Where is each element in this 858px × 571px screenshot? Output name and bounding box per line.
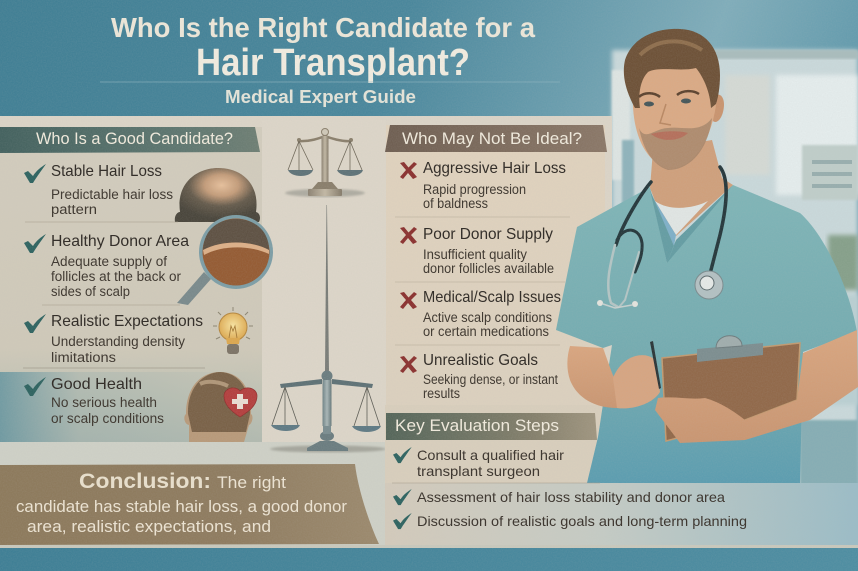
item: healthy donor area: Healthy Donor Area bbox=[51, 233, 189, 250]
not ideal header bbox=[385, 125, 607, 152]
beige strip below right panel bbox=[385, 405, 610, 485]
lower left paper strip bbox=[0, 442, 400, 546]
item: aggressive hair loss bbox=[400, 160, 566, 211]
panel: conclusion: candidate has stable hair loss, a good donor bbox=[16, 497, 347, 516]
item: medical scalp issues bbox=[400, 289, 561, 339]
item: medical scalp issues: Medical/Scalp Issues bbox=[423, 289, 561, 306]
item: medical scalp issues: or certain medications bbox=[423, 324, 549, 339]
icon: head with heart bbox=[184, 372, 257, 442]
hair bbox=[624, 29, 720, 108]
not ideal header: Who May Not Be Ideal? bbox=[402, 129, 582, 148]
item: unrealistic goals: results bbox=[423, 386, 460, 401]
icon: balding head bbox=[175, 168, 260, 222]
item: healthy donor area bbox=[24, 233, 189, 299]
eyes and brows bbox=[639, 91, 699, 97]
panel: conclusion: The right bbox=[217, 473, 286, 492]
scrubs torso bbox=[556, 185, 857, 483]
item: stable hair loss bbox=[24, 163, 173, 217]
subtitle: Medical Expert Guide bbox=[225, 86, 416, 107]
left forearm bbox=[567, 346, 622, 408]
key steps header: Key Evaluation Steps bbox=[395, 416, 559, 435]
item: unrealistic goals bbox=[400, 352, 558, 401]
panel: good candidates bbox=[0, 127, 273, 442]
writing hand bbox=[613, 355, 660, 408]
item: realistic expectations: limitations bbox=[51, 350, 116, 365]
step 1 bbox=[393, 447, 564, 479]
clipboard bbox=[662, 343, 800, 441]
item: healthy donor area: Adequate supply of bbox=[51, 254, 167, 269]
step 2: Assessment of hair loss stability and donor area bbox=[417, 489, 725, 505]
item: poor donor supply: Poor Donor Supply bbox=[423, 226, 553, 243]
item: healthy donor area: follicles at the back or bbox=[51, 269, 182, 284]
beard bbox=[639, 118, 712, 170]
doctor illustration bbox=[556, 29, 858, 483]
item: good health: No serious health bbox=[51, 395, 157, 410]
right forearm and hand bbox=[655, 330, 858, 443]
item: aggressive hair loss: Rapid progression bbox=[423, 182, 526, 197]
stethoscope chest piece bbox=[695, 271, 723, 299]
item: unrealistic goals: Seeking dense, or instant bbox=[423, 372, 558, 387]
icon: magnifier bbox=[177, 215, 273, 305]
title line one: Who Is the Right Candidate for a bbox=[111, 12, 535, 43]
top beige band bbox=[0, 116, 612, 446]
icon: top scales bbox=[285, 128, 365, 197]
item: good health: or scalp conditions bbox=[51, 411, 164, 426]
stethoscope bbox=[597, 167, 726, 308]
item: stable hair loss: Stable Hair Loss bbox=[51, 163, 162, 180]
item: medical scalp issues: Active scalp conditions bbox=[423, 310, 552, 325]
item: poor donor supply: donor follicles available bbox=[423, 261, 554, 276]
pen bbox=[650, 341, 661, 389]
item: healthy donor area: sides of scalp bbox=[51, 284, 130, 299]
good candidate header: Who Is a Good Candidate? bbox=[36, 129, 233, 148]
panel: key evaluation steps bbox=[386, 413, 747, 529]
item: realistic expectations bbox=[24, 313, 203, 365]
item: good health bbox=[24, 376, 164, 426]
central paper panel bbox=[262, 120, 386, 465]
head bbox=[713, 94, 724, 122]
central divider needle bbox=[325, 205, 329, 372]
title line two: Hair Transplant? bbox=[196, 42, 470, 84]
item: realistic expectations: Understanding density bbox=[51, 334, 185, 349]
item: aggressive hair loss: of baldness bbox=[423, 196, 488, 211]
undershirt bbox=[655, 201, 708, 235]
step 3: Discussion of realistic goals and long-term planning bbox=[417, 513, 747, 529]
step 1: transplant surgeon bbox=[417, 463, 540, 479]
neck bbox=[650, 140, 733, 236]
item: realistic expectations: Realistic Expectations bbox=[51, 313, 203, 330]
item: unrealistic goals: Unrealistic Goals bbox=[423, 352, 538, 369]
item: poor donor supply: Insufficient quality bbox=[423, 247, 527, 262]
clinic background bbox=[612, 50, 858, 490]
item: aggressive hair loss: Aggressive Hair Loss bbox=[423, 160, 566, 177]
good candidate header bbox=[0, 127, 260, 153]
icon: bottom scales bbox=[270, 370, 386, 452]
icon: light bulb bbox=[213, 307, 253, 354]
bottom edge strips bbox=[0, 545, 858, 548]
panel: not ideal bbox=[385, 125, 607, 411]
step 1: Consult a qualified hair bbox=[417, 447, 564, 463]
title block bbox=[100, 12, 560, 107]
item: good health: Good Health bbox=[51, 376, 142, 393]
lower right band bbox=[385, 483, 858, 548]
key steps header bbox=[386, 413, 597, 440]
panel: conclusion bbox=[0, 464, 379, 545]
item: stable hair loss: Predictable hair loss bbox=[51, 187, 173, 202]
item: stable hair loss: pattern bbox=[51, 202, 97, 217]
conclusion text: Conclusion: bbox=[79, 470, 211, 493]
panel: conclusion: area, realistic expectations, and bbox=[27, 517, 271, 536]
collar bbox=[650, 185, 733, 263]
item: poor donor supply bbox=[400, 226, 554, 276]
